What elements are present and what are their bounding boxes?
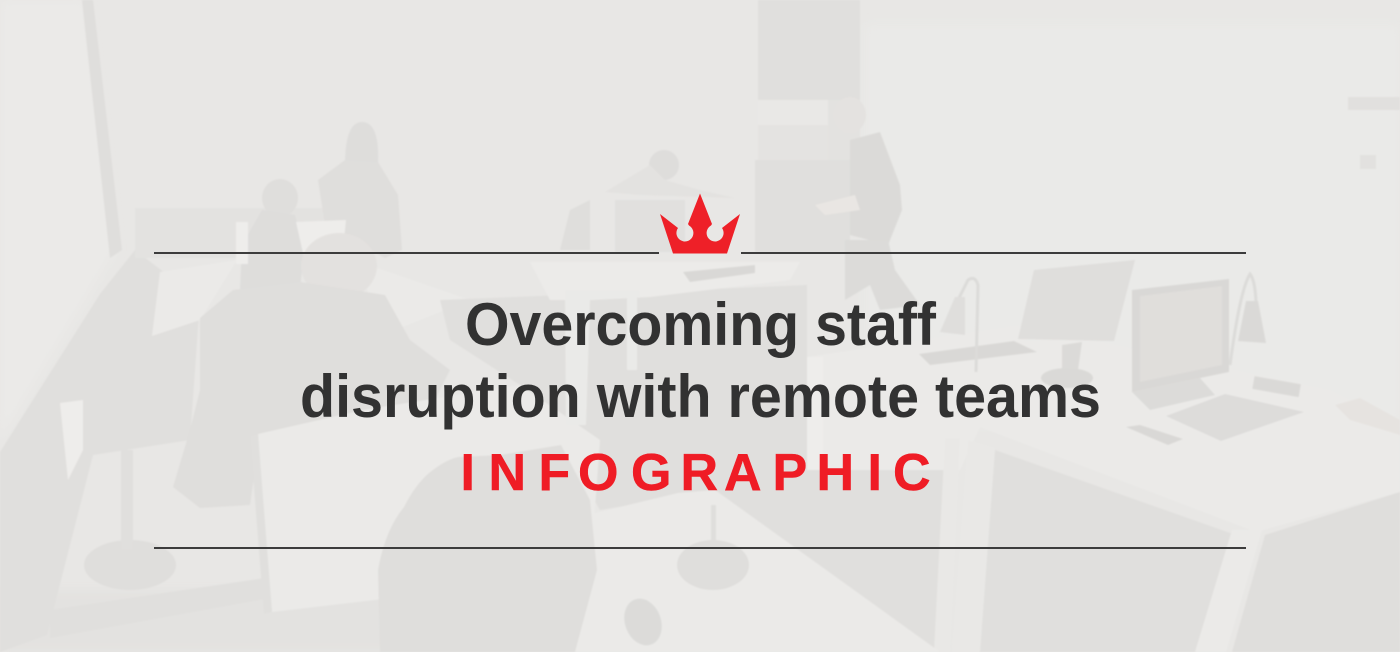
left desk and chair <box>50 208 470 638</box>
crouching person <box>605 150 735 198</box>
bald man <box>173 233 450 508</box>
dark wall panel <box>755 0 860 252</box>
wall fixture <box>1348 97 1400 169</box>
white paper <box>258 385 600 612</box>
laptop <box>919 260 1135 388</box>
hand on mouse <box>1335 398 1400 435</box>
bottom rule <box>154 547 1246 549</box>
icon: crown logo <box>660 194 740 254</box>
subtitle: INFOGRAPHIC <box>460 444 931 502</box>
standing man <box>815 97 920 310</box>
bottom desk <box>565 490 940 652</box>
seated person <box>240 179 304 290</box>
window frame <box>0 0 200 652</box>
title: disruption with remote teams <box>300 363 1101 430</box>
standing person <box>318 122 402 258</box>
centre desks <box>530 200 800 425</box>
bottom person <box>378 445 597 652</box>
monitor <box>1126 279 1304 445</box>
title: Overcoming staff <box>465 291 937 358</box>
right desk <box>715 325 1400 652</box>
monitor screens <box>236 220 346 264</box>
desk items <box>618 505 749 651</box>
top rule left <box>154 252 659 254</box>
desk lamps <box>958 274 1256 372</box>
area under centre desks <box>440 285 807 510</box>
top rule right <box>741 252 1246 254</box>
title <box>300 291 1101 430</box>
